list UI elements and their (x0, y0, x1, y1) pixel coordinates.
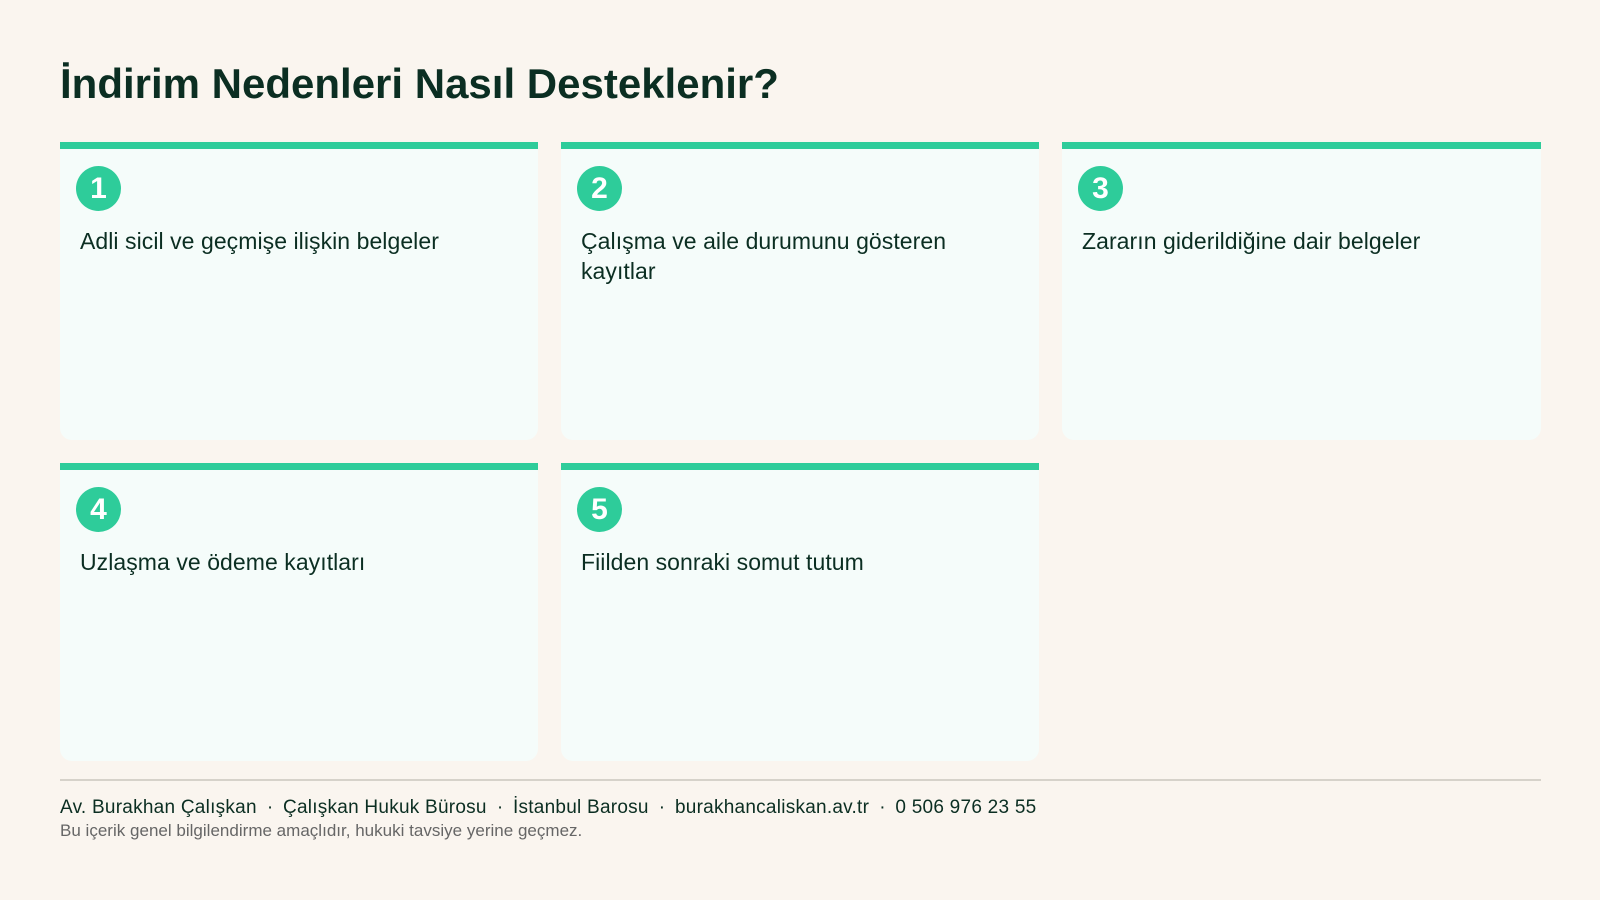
card 1 text: Adli sicil ve geçmişe ilişkin belgeler (80, 228, 439, 254)
number badge 3 (1078, 166, 1123, 211)
number badge 5: 5 (591, 493, 608, 526)
title: İndirim Nedenleri Nasıl Desteklenir? (60, 60, 779, 107)
card 5 text: Fiilden sonraki somut tutum (581, 549, 864, 575)
footer disclaimer: Bu içerik genel bilgilendirme amaçlıdır, hukuki tavsiye yerine geçmez. (60, 821, 582, 840)
footer contact line: Av. Burakhan Çalışkan · Çalışkan Hukuk Bürosu · İstanbul Barosu · burakhancaliskan.av.tr · 0 506 976 23 55 (60, 797, 1036, 818)
number badge 4 (76, 487, 121, 532)
panel: card 5 (561, 463, 1039, 761)
number badge 2 (577, 166, 622, 211)
card 2 text: Çalışma ve aile durumunu gösteren kayıtlar (581, 228, 946, 284)
card 4 text: Uzlaşma ve ödeme kayıtları (80, 549, 365, 575)
number badge 3: 3 (1092, 172, 1109, 205)
number badge 2: 2 (591, 172, 608, 205)
panel: card 1 (60, 142, 538, 440)
number badge 1 (76, 166, 121, 211)
card 3 text: Zararın giderildiğine dair belgeler (1082, 228, 1420, 254)
number badge 1: 1 (90, 172, 107, 205)
number badge 5 (577, 487, 622, 532)
panel: card 4 (60, 463, 538, 761)
panel: card 2 (561, 142, 1039, 440)
number badge 4: 4 (90, 493, 107, 526)
panel: card 3 (1062, 142, 1541, 440)
